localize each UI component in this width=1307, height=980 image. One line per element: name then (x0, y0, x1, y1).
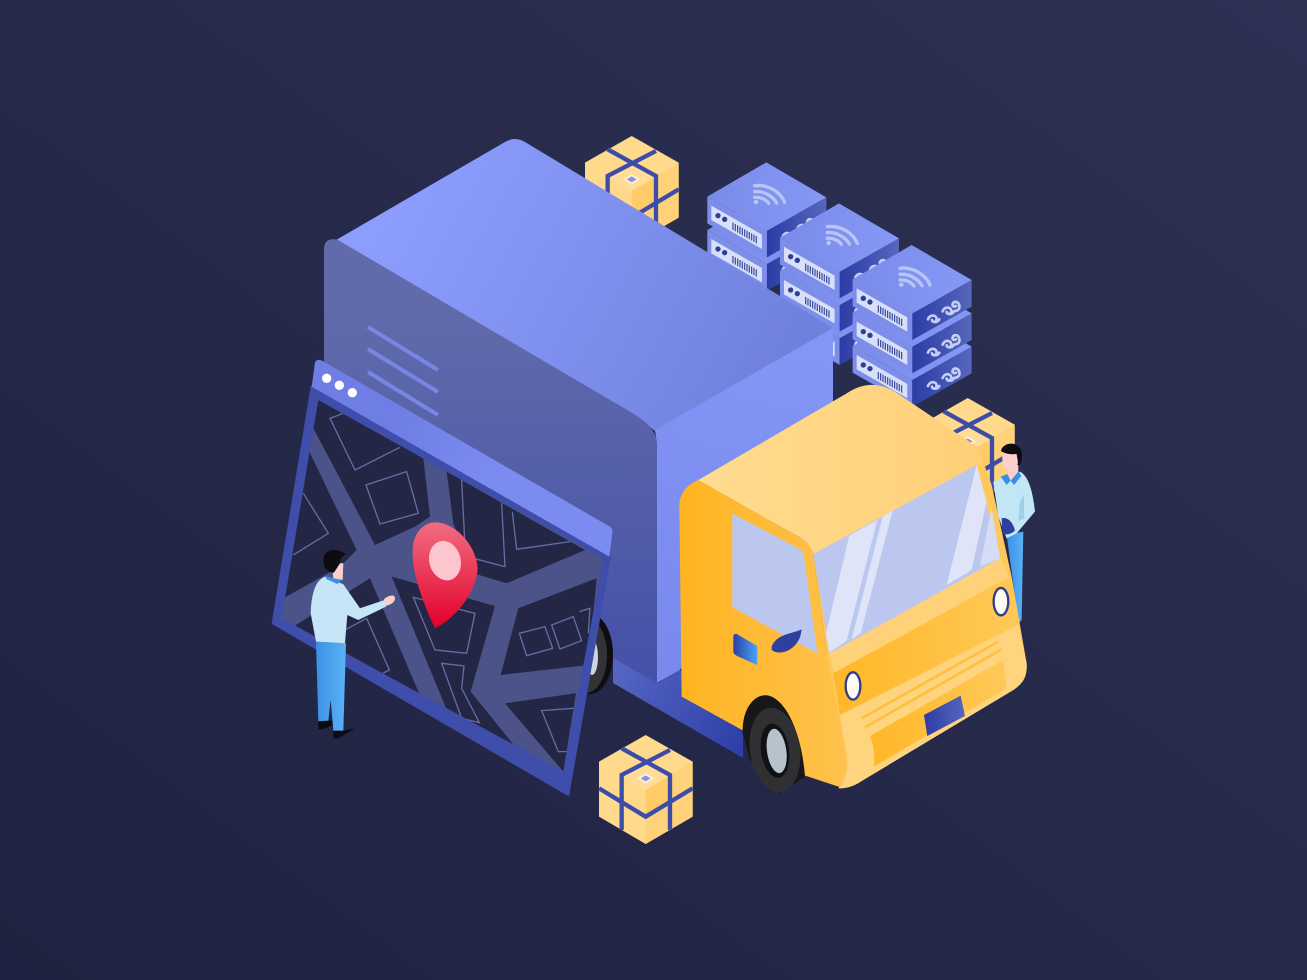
location pin (413, 522, 478, 628)
cargo lines (368, 327, 438, 415)
front wheel (743, 695, 806, 795)
map blocks (283, 400, 597, 772)
package: behind truck (585, 136, 679, 245)
orange band (833, 577, 1018, 715)
package: foreground (599, 735, 693, 844)
mirror (772, 629, 802, 653)
lower grille (838, 625, 1027, 788)
windshield (813, 465, 1000, 653)
delivery truck cargo box (324, 139, 833, 758)
cargo top (336, 139, 833, 431)
title bar (312, 360, 612, 557)
map (282, 400, 604, 772)
person: left (311, 550, 395, 738)
server stack: front (853, 245, 972, 407)
cab roof (698, 385, 982, 554)
window frame (273, 387, 610, 795)
side window (732, 513, 817, 653)
person: right (993, 444, 1035, 623)
map outlines (293, 413, 590, 752)
truck cab (679, 385, 1027, 795)
bumper light band (830, 558, 1011, 674)
window buttons (322, 374, 357, 397)
package: behind cab (921, 398, 1015, 507)
cab front (813, 448, 1027, 788)
side lamp (733, 634, 757, 665)
map window (260, 360, 627, 797)
cargo side (324, 239, 657, 683)
server racks (707, 162, 972, 407)
cargo front (655, 328, 833, 683)
rear wheel (565, 614, 613, 694)
headlights (846, 588, 1008, 700)
server stack: rear (707, 162, 826, 291)
server stack: middle (780, 203, 899, 365)
chassis (613, 658, 743, 758)
number plate (924, 696, 965, 736)
cab side (679, 480, 850, 788)
